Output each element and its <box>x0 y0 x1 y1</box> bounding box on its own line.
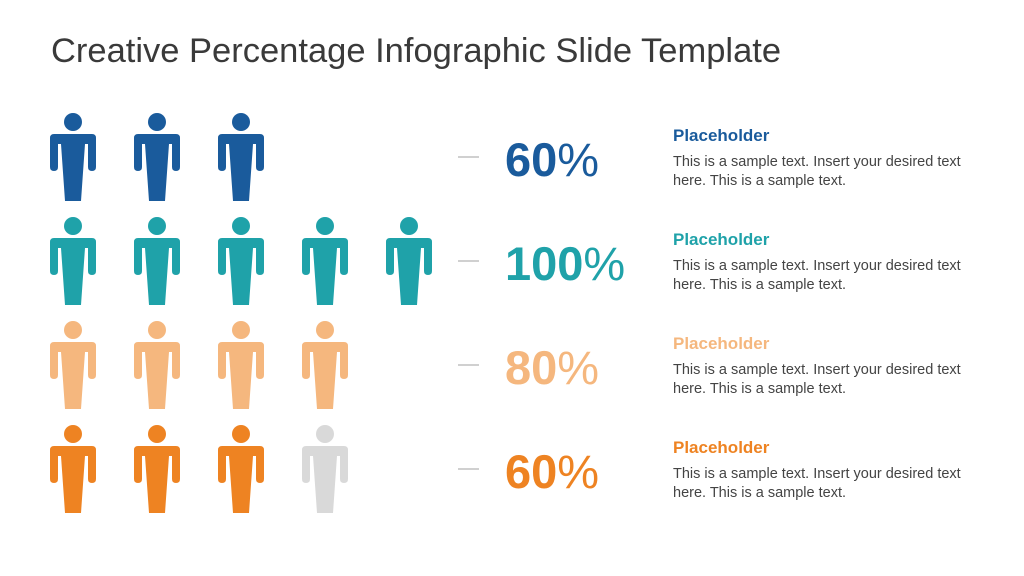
row 4: 60% orange <box>50 425 961 513</box>
heading: Placeholder <box>673 438 769 457</box>
people icons <box>50 113 264 201</box>
percentage: 60% <box>505 133 599 186</box>
text: This is a sample text. Insert your desired text here. This is a sample text. <box>673 362 961 397</box>
percentage: 80% <box>505 341 599 394</box>
title: Creative Percentage Infographic Slide Template <box>51 32 781 70</box>
heading: Placeholder <box>673 334 769 353</box>
row 1: 60% blue <box>50 113 961 201</box>
people icons <box>50 321 348 409</box>
row 3: 80% peach <box>50 321 961 409</box>
people icons <box>50 217 432 305</box>
row 2: 100% teal <box>50 217 961 305</box>
people icons <box>50 425 348 513</box>
percentage: 100% <box>505 237 625 290</box>
text: This is a sample text. Insert your desired text here. This is a sample text. <box>673 466 961 501</box>
text: This is a sample text. Insert your desired text here. This is a sample text. <box>673 154 961 189</box>
text: This is a sample text. Insert your desired text here. This is a sample text. <box>673 258 961 293</box>
percentage: 60% <box>505 445 599 498</box>
heading: Placeholder <box>673 126 769 145</box>
heading: Placeholder <box>673 230 769 249</box>
